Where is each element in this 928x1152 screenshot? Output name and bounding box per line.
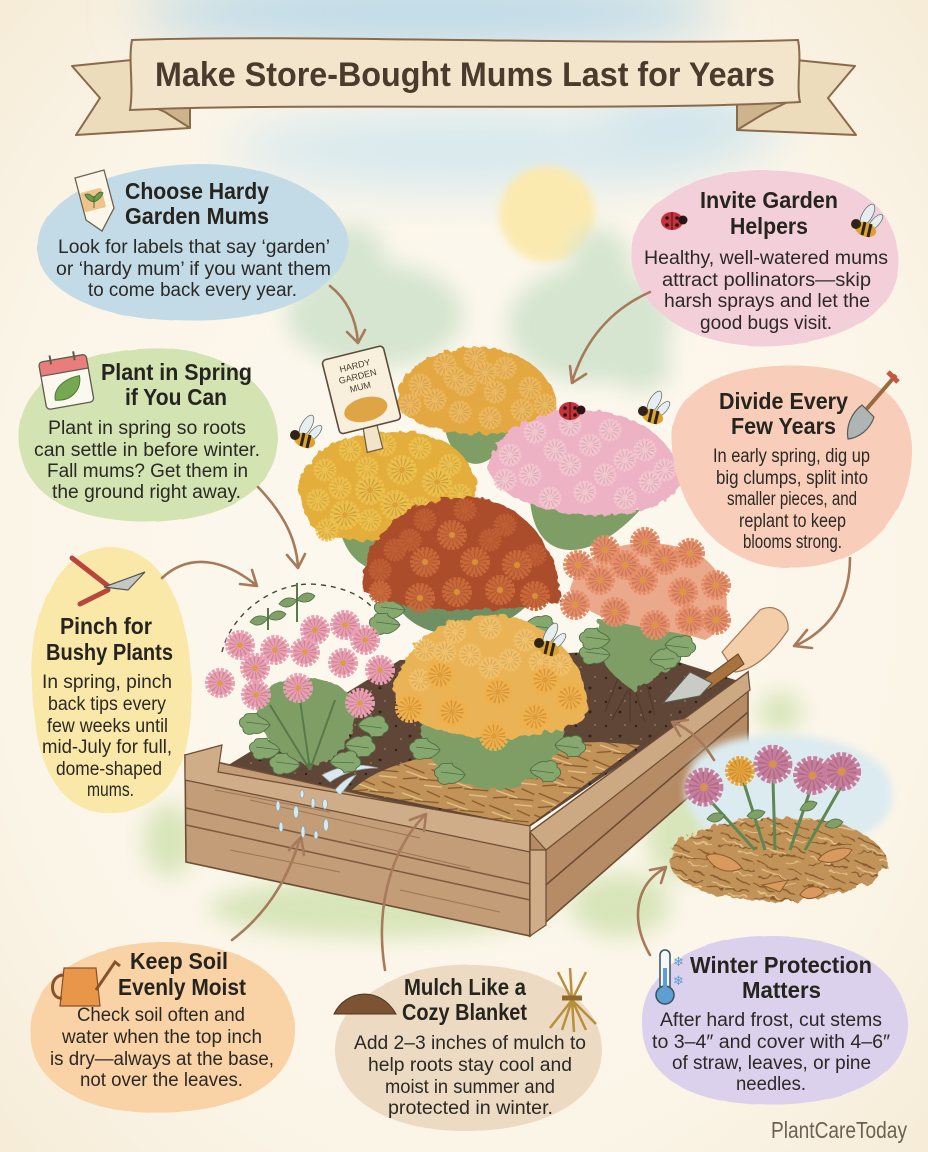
body: attract pollinators—skip bbox=[662, 270, 871, 291]
heading: Matters bbox=[742, 977, 821, 1003]
body: few weeks until bbox=[47, 716, 168, 737]
body bbox=[713, 446, 870, 553]
body: Add 2–3 inches of mulch to bbox=[354, 1033, 586, 1054]
grass bbox=[144, 692, 802, 938]
heading bbox=[46, 613, 173, 665]
background foliage bbox=[287, 225, 672, 391]
heading bbox=[118, 948, 246, 1000]
plant: gold front mum bbox=[394, 615, 588, 790]
heading bbox=[125, 178, 269, 229]
heading: Evenly Moist bbox=[118, 974, 246, 1000]
pinch indicator bbox=[222, 584, 372, 652]
icon: thermometer bbox=[656, 950, 684, 1004]
plant: pink mum bbox=[488, 410, 680, 550]
body: good bugs visit. bbox=[700, 313, 832, 334]
plant: top orange mum bbox=[397, 347, 557, 464]
heading: if You Can bbox=[125, 384, 227, 410]
body: protected in winter. bbox=[388, 1098, 553, 1119]
pinched sprig bbox=[250, 583, 315, 630]
heading: Invite Garden bbox=[700, 187, 838, 213]
water droplets bbox=[276, 765, 378, 839]
arrow: choose to sign bbox=[330, 286, 365, 343]
icon: ladybug bbox=[661, 212, 688, 230]
title: Make Store-Bought Mums Last for Years bbox=[155, 56, 775, 94]
arrow: water to droplets bbox=[232, 837, 304, 940]
icon: plant sign bbox=[322, 345, 407, 458]
body bbox=[644, 248, 888, 334]
icon: straw bundle bbox=[550, 968, 596, 1032]
icon: thermometer: ❄ bbox=[673, 954, 684, 969]
panel: choose hardy garden mums bbox=[38, 164, 348, 321]
body: to 3–4″ and cover with 4–6″ bbox=[652, 1032, 890, 1053]
body: dome-shaped bbox=[56, 759, 162, 780]
heading bbox=[700, 187, 838, 239]
panel: plant in spring bbox=[19, 348, 278, 522]
body: Plant in spring so roots bbox=[48, 418, 246, 439]
icon: seed packet bbox=[75, 170, 114, 231]
body: Healthy, well-watered mums bbox=[644, 248, 888, 269]
body: replant to keep bbox=[739, 511, 846, 532]
body: can settle in before winter. bbox=[34, 440, 260, 461]
panel: divide every few years bbox=[672, 365, 912, 568]
heading: Bushy Plants bbox=[46, 639, 173, 665]
body: the ground right away. bbox=[52, 482, 241, 503]
heading: Pinch for bbox=[60, 613, 152, 639]
body: harsh sprays and let the bbox=[664, 291, 870, 312]
panel: invite garden helpers bbox=[632, 170, 898, 346]
body: not over the leaves. bbox=[80, 1070, 243, 1091]
heading: Plant in Spring bbox=[101, 359, 252, 385]
icon: pruners bbox=[72, 558, 145, 604]
heading bbox=[719, 388, 848, 439]
panel: mulch like a cozy blanket bbox=[334, 965, 602, 1131]
panel: winter protection matters bbox=[642, 936, 908, 1105]
body: water when the top inch bbox=[61, 1027, 262, 1048]
heading: Mulch Like a bbox=[404, 974, 526, 1000]
heading: Helpers bbox=[730, 213, 808, 239]
body: Check soil often and bbox=[77, 1005, 245, 1026]
icon: hand with trowel bbox=[663, 608, 788, 703]
body: moist in summer and bbox=[385, 1077, 555, 1098]
title banner bbox=[72, 38, 856, 135]
icon: shovel bbox=[848, 372, 898, 439]
plant: coral mum bbox=[562, 529, 729, 722]
body: mums. bbox=[87, 780, 134, 801]
body bbox=[42, 672, 172, 801]
sun bbox=[499, 166, 595, 262]
body: to come back every year. bbox=[88, 280, 297, 301]
body: of straw, leaves, or pine bbox=[672, 1053, 871, 1074]
raised garden bed bbox=[144, 650, 802, 938]
body: is dry—always at the base, bbox=[50, 1049, 274, 1070]
heading: Keep Soil bbox=[130, 948, 228, 974]
body bbox=[56, 237, 331, 301]
heading: Cozy Blanket bbox=[402, 999, 527, 1025]
soil bbox=[212, 650, 742, 828]
heading: Winter Protection bbox=[690, 952, 872, 978]
panel: keep soil evenly moist bbox=[30, 942, 295, 1113]
heading: Few Years bbox=[731, 413, 836, 439]
sign text: HARDY bbox=[338, 357, 371, 374]
icon: bee bbox=[851, 202, 885, 240]
banner tails bbox=[72, 60, 856, 135]
body bbox=[34, 418, 260, 503]
body: help roots stay cool and bbox=[368, 1055, 572, 1076]
heading: Choose Hardy bbox=[125, 178, 269, 204]
panel: pinch for bushy plants bbox=[32, 548, 191, 813]
icon: plant sign: MUM bbox=[349, 380, 372, 395]
banner body bbox=[130, 38, 800, 110]
body: Fall mums? Get them in bbox=[47, 461, 248, 482]
icon: thermometer: ❄ bbox=[673, 973, 684, 988]
right rim bbox=[530, 672, 750, 850]
heading: Garden Mums bbox=[125, 203, 269, 229]
body bbox=[652, 1010, 890, 1095]
mulch bbox=[352, 742, 640, 826]
body: smaller pieces, and bbox=[727, 489, 857, 510]
icon: calendar bbox=[38, 349, 94, 410]
illustration: winter protected plant bbox=[670, 734, 892, 901]
arrow: plant in spring to pinched plant bbox=[258, 487, 305, 568]
right side of bed bbox=[530, 672, 748, 936]
arrow: inset to bed bbox=[672, 720, 714, 760]
plant: red mum bbox=[362, 497, 560, 637]
heading bbox=[690, 952, 872, 1003]
arrow: mulch to bed bbox=[382, 814, 426, 970]
body: needles. bbox=[736, 1074, 806, 1095]
heading: Divide Every bbox=[719, 388, 848, 414]
arrow: divide to trowel bbox=[794, 558, 850, 648]
body: big clumps, split into bbox=[716, 468, 868, 489]
icon: mulch pile bbox=[334, 994, 396, 1014]
heading bbox=[101, 359, 252, 410]
body: blooms strong. bbox=[743, 532, 842, 553]
body: In spring, pinch bbox=[42, 672, 172, 693]
body bbox=[354, 1033, 586, 1119]
front of bed bbox=[185, 755, 530, 936]
plant: yellow mum bbox=[298, 432, 476, 571]
arrow: pinch to plant bbox=[162, 562, 257, 586]
body: After hard frost, cut stems bbox=[660, 1010, 882, 1031]
plant: pinched pink mum bbox=[207, 583, 393, 774]
body: mid-July for full, bbox=[42, 737, 172, 758]
icon: bees and ladybug in garden bbox=[290, 389, 672, 659]
icon: watering can bbox=[52, 962, 120, 1006]
icon: plant sign: GARDEN bbox=[338, 367, 378, 386]
body: or ‘hardy mum’ if you want them bbox=[56, 259, 331, 280]
arrow: winter panel to inset bbox=[638, 867, 666, 955]
body: back tips every bbox=[48, 694, 166, 715]
arrow: helpers to ladybug bbox=[570, 292, 650, 383]
body: Look for labels that say ‘garden’ bbox=[58, 237, 330, 258]
body bbox=[50, 1005, 274, 1091]
body: In early spring, dig up bbox=[713, 446, 870, 467]
heading bbox=[402, 974, 527, 1025]
